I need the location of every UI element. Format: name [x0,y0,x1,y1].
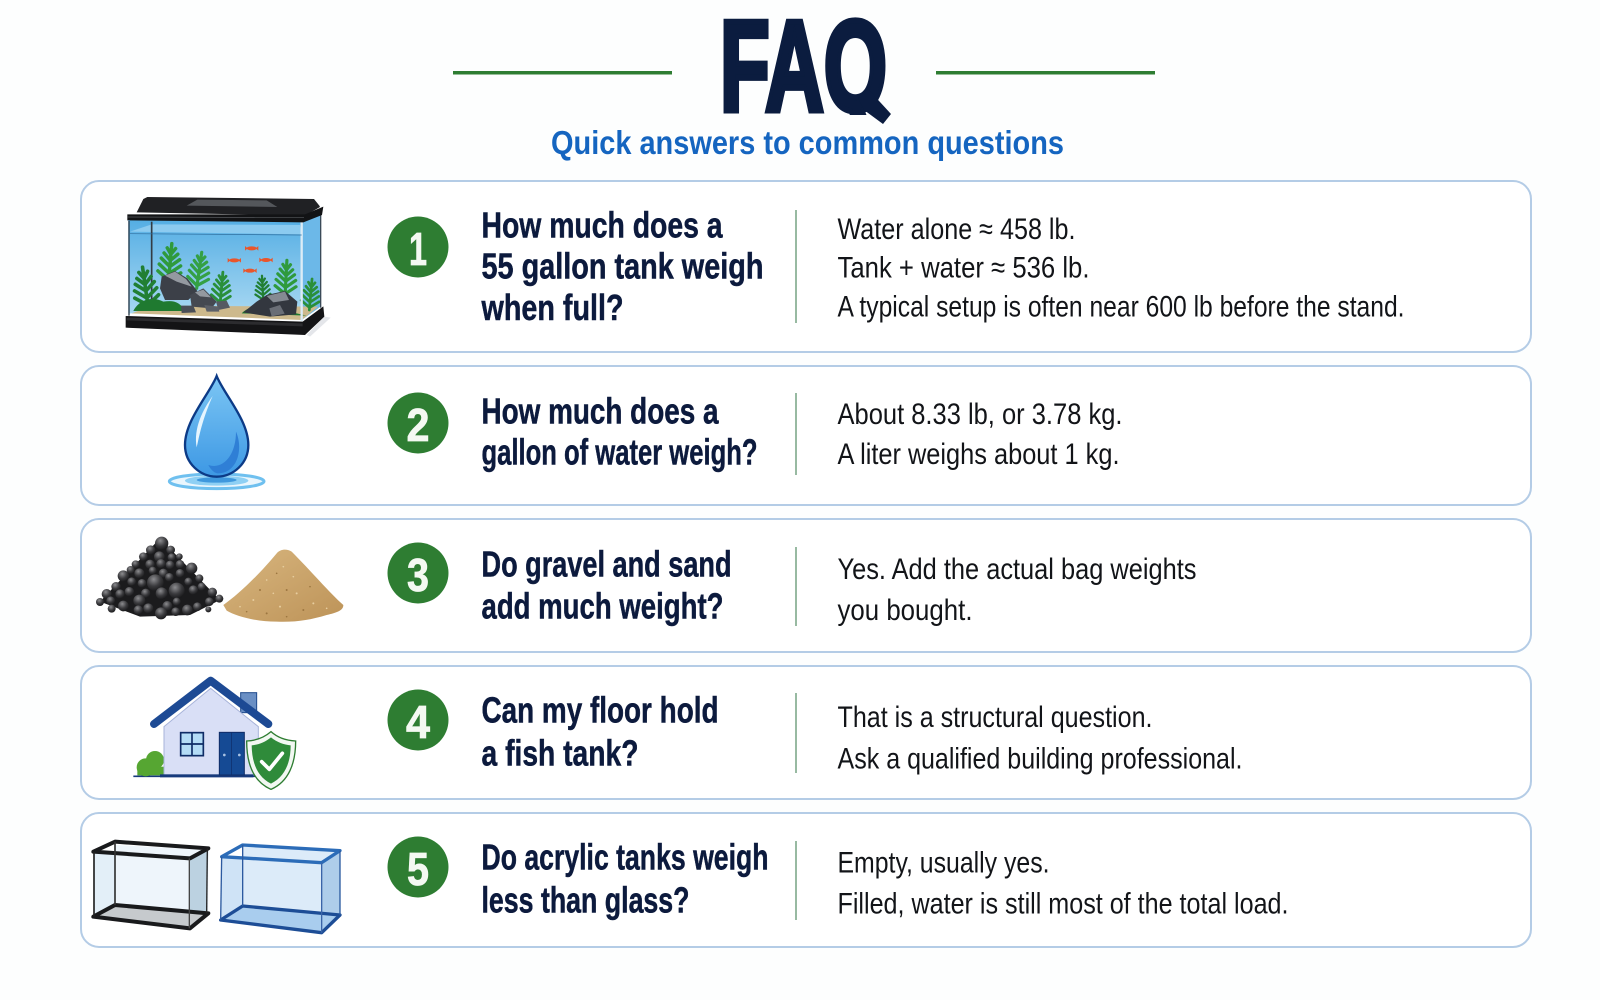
icon: glass and acrylic tanks [93,842,340,933]
answer text 1: Tank + water ≈ 536 lb. [838,252,1090,284]
number badge 2: 2 [406,399,430,451]
panel: question 1 [81,181,1531,352]
question text 4: a fish tank? [482,732,638,774]
icon: aquarium [126,197,331,337]
question text 4: Can my floor hold [482,690,718,730]
question text 3: Do gravel and sand [482,544,732,584]
question text 2: How much does a [482,390,719,432]
answer text 1: A typical setup is often near 600 lb before the stand. [838,290,1404,324]
answer text 4 [838,701,1242,776]
number badge 3: 3 [407,549,429,601]
number badge 1 [388,216,448,278]
icon: gravel and sand piles [96,537,343,622]
answer text 2: A liter weighs about 1 kg. [838,438,1120,471]
question text 5: less than glass? [482,880,690,920]
question text 3 [482,544,732,626]
title [724,17,891,124]
panel: question 2 [81,366,1531,505]
subtitle: Quick answers to common questions [551,124,1064,161]
icon: house with shield [133,681,296,789]
question text 2: gallon of water weigh? [482,432,758,472]
answer text 3 [838,553,1196,627]
icon: water drop [169,376,264,489]
panel: question 4 [81,666,1531,799]
answer text 2: About 8.33 lb, or 3.78 kg. [838,398,1122,431]
panel: question 5 [81,813,1531,947]
question text 1 [481,204,764,328]
panel: question 3 [81,519,1531,652]
answer text 5 [838,846,1288,920]
number badge 3 [388,542,448,604]
answer text 2 [838,398,1122,471]
question text 5: Do acrylic tanks weigh [482,836,768,878]
answer text 3: Yes. Add the actual bag weights [838,553,1196,586]
number badge 5 [388,836,448,898]
number badge 1: 1 [409,223,427,275]
number badge 2 [388,392,448,454]
answer text 5: Empty, usually yes. [838,846,1050,880]
question text 1: How much does a [482,204,723,246]
question text 2 [482,390,758,472]
header [453,17,1155,161]
question text 1: when full? [481,287,624,328]
answer text 3: you bought. [838,594,972,627]
answer text 4: That is a structural question. [838,701,1152,734]
answer text 5: Filled, water is still most of the total load. [838,888,1288,920]
question text 3: add much weight? [482,586,724,626]
answer text 1 [838,213,1404,324]
number badge 4 [388,690,448,750]
answer text 4: Ask a qualified building professional. [838,742,1242,776]
number badge 4: 4 [406,696,430,748]
number badge 5: 5 [407,843,429,895]
question text 4 [482,690,718,774]
question text 1: 55 gallon tank weigh [482,246,764,286]
answer text 1: Water alone ≈ 458 lb. [838,213,1076,246]
question text 5 [482,836,768,920]
